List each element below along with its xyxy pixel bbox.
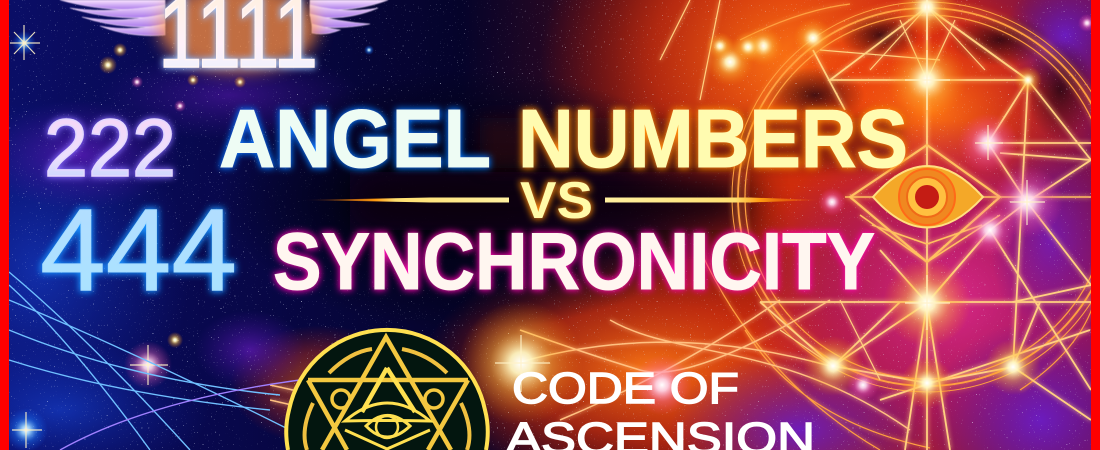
right line	[605, 198, 821, 202]
number 222: 222	[44, 103, 176, 194]
blue light streaks bottom left	[9, 272, 300, 450]
logo ring arcs	[305, 349, 469, 450]
wings behind 1111	[60, 0, 388, 36]
sacred geometry mandala	[270, 0, 1100, 450]
mandala lines	[660, 0, 1091, 450]
right wing	[310, 0, 388, 34]
number 222: 222	[44, 103, 176, 194]
title: synchronicity: SYNCHRONICITY	[273, 217, 875, 307]
vs text: VS	[520, 172, 593, 230]
logo emblem	[286, 329, 488, 450]
logo side circles	[332, 390, 350, 408]
number 444: 444	[40, 184, 237, 315]
title: synchronicity: SYNCHRONICITY	[273, 217, 875, 307]
left wing	[60, 0, 165, 36]
glow behind 1111	[158, 0, 318, 72]
dark halo behind title	[220, 70, 900, 330]
number 444: 444	[40, 184, 237, 315]
left line	[303, 198, 509, 202]
logo star	[308, 337, 468, 450]
mandala rings	[700, 2, 1100, 450]
left red border	[0, 0, 9, 450]
logo disc	[296, 329, 478, 450]
brand name	[506, 364, 815, 450]
logo inner triangle	[362, 368, 415, 412]
right red border	[1091, 0, 1100, 450]
logo eye	[345, 403, 430, 449]
versus divider	[303, 172, 821, 230]
brand name: CODE OF	[512, 364, 739, 413]
title: angel: ANGEL	[219, 92, 491, 185]
vs text: VS	[520, 172, 593, 230]
title: numbers: NUMBERS	[518, 92, 908, 185]
title: angel: ANGEL	[219, 92, 491, 185]
mandala diamond around eye	[845, 145, 1091, 262]
title: numbers: NUMBERS	[518, 92, 908, 185]
eye of providence	[873, 166, 983, 228]
sweeping light arcs	[270, 300, 910, 440]
